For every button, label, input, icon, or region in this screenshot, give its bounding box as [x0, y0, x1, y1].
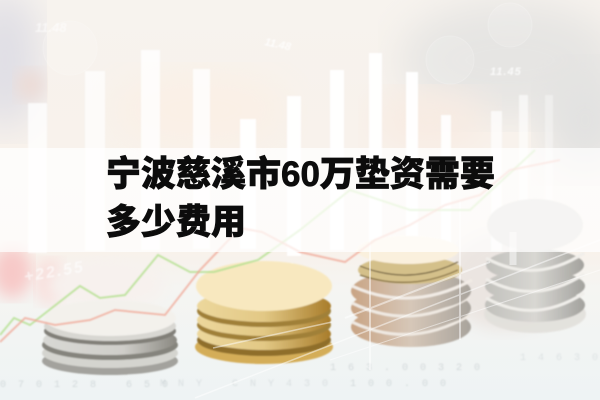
- chart number labels: [23, 20, 522, 358]
- chart number labels: 11.45: [490, 66, 522, 78]
- coin stack: silver: [42, 300, 178, 375]
- white bar chart: [28, 50, 553, 256]
- ledger paper digits: 1 4 6 3 0: [520, 353, 600, 364]
- chart number labels: +31.66: [263, 262, 295, 277]
- chart number labels: 16.66: [262, 338, 294, 358]
- chart number labels: 11.48: [35, 20, 67, 35]
- title: 多少费用: [106, 203, 246, 242]
- ledger paper digits: M N Y C N Y 4 3 0: [160, 379, 331, 390]
- coin stack: mixed: [351, 236, 472, 347]
- line chart: green: [0, 150, 535, 335]
- ledger paper digits: 1 0 0 . 0 0: [350, 379, 449, 390]
- chart number labels: +22.55: [23, 259, 86, 286]
- title band: [0, 148, 600, 252]
- chart number labels: 11.48: [263, 36, 293, 54]
- decorative bubbles: [43, 3, 532, 84]
- ledger paper digits: [0, 353, 600, 391]
- ledger paper digits: 0 7 0 1 2 8 6 5 0: [0, 380, 171, 391]
- title: [106, 154, 495, 242]
- line chart: red: [0, 160, 560, 342]
- title: 宁波慈溪市60万垫资需要: [106, 155, 495, 194]
- ledger paper digits: 1 6 3 . 0 0 3 2 0: [330, 363, 483, 374]
- coin stack: gold: [195, 261, 333, 364]
- coin stack: grey: [484, 199, 586, 333]
- white diagonal light streaks: [195, 200, 600, 398]
